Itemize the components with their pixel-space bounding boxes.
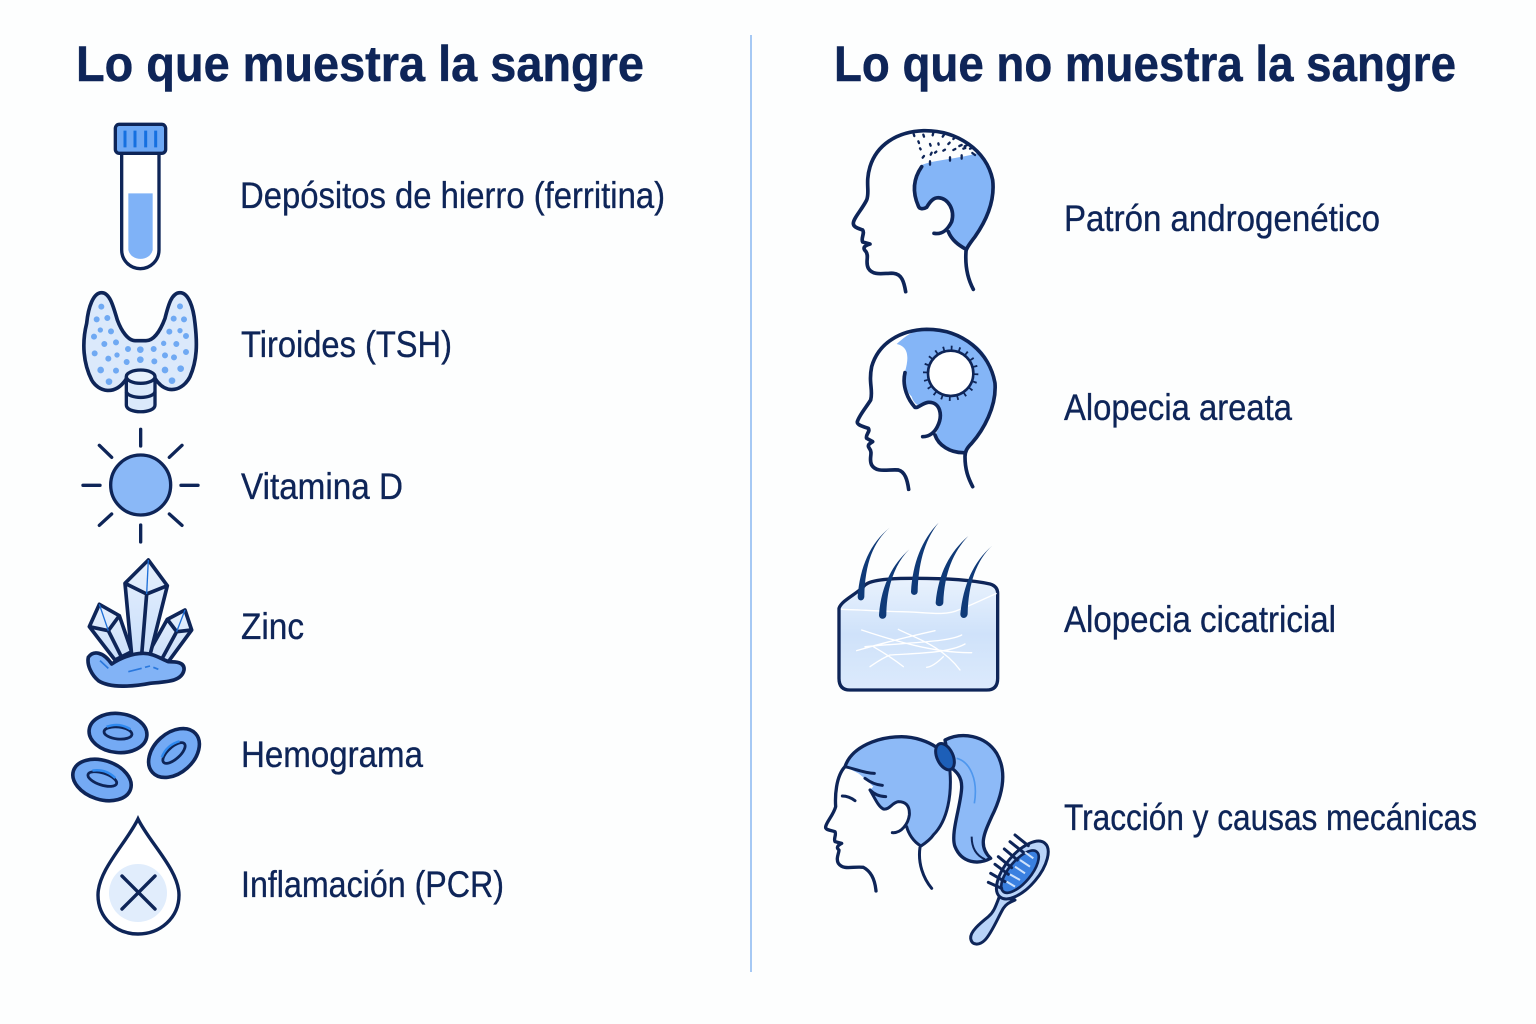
icon: head with alopecia areata — [857, 329, 995, 489]
label: vitamina d: Vitamina D — [241, 466, 403, 507]
label: ferritina: Depósitos de hierro (ferritina) — [240, 175, 665, 216]
icon: crystals — [88, 560, 192, 686]
label: inflamacion: Inflamación (PCR) — [241, 864, 504, 905]
icon: red blood cells — [67, 711, 209, 808]
label: alopecia cicatricial: Alopecia cicatricial — [1064, 599, 1336, 640]
icon: sun — [83, 429, 198, 542]
label: hemograma: Hemograma — [241, 734, 423, 775]
icon: thyroid — [84, 293, 196, 412]
icon: ponytail and brush — [826, 736, 1058, 944]
label: alopecia areata: Alopecia areata — [1064, 387, 1292, 428]
icon: head with androgenetic pattern — [853, 131, 993, 292]
heading: lo que muestra la sangre: Lo que muestra la sangre — [76, 36, 644, 92]
divider — [750, 35, 752, 972]
heading: lo que no muestra la sangre: Lo que no muestra la sangre — [834, 36, 1456, 92]
label: tiroides: Tiroides (TSH) — [241, 324, 452, 365]
label: patron androgenetico: Patrón androgenético — [1064, 198, 1380, 239]
label: zinc: Zinc — [241, 606, 304, 647]
icon: drop with cross — [98, 819, 179, 934]
icon: test tube — [115, 124, 166, 269]
label: traccion: Tracción y causas mecánicas — [1064, 797, 1477, 838]
icon: scarred scalp block — [839, 523, 998, 690]
